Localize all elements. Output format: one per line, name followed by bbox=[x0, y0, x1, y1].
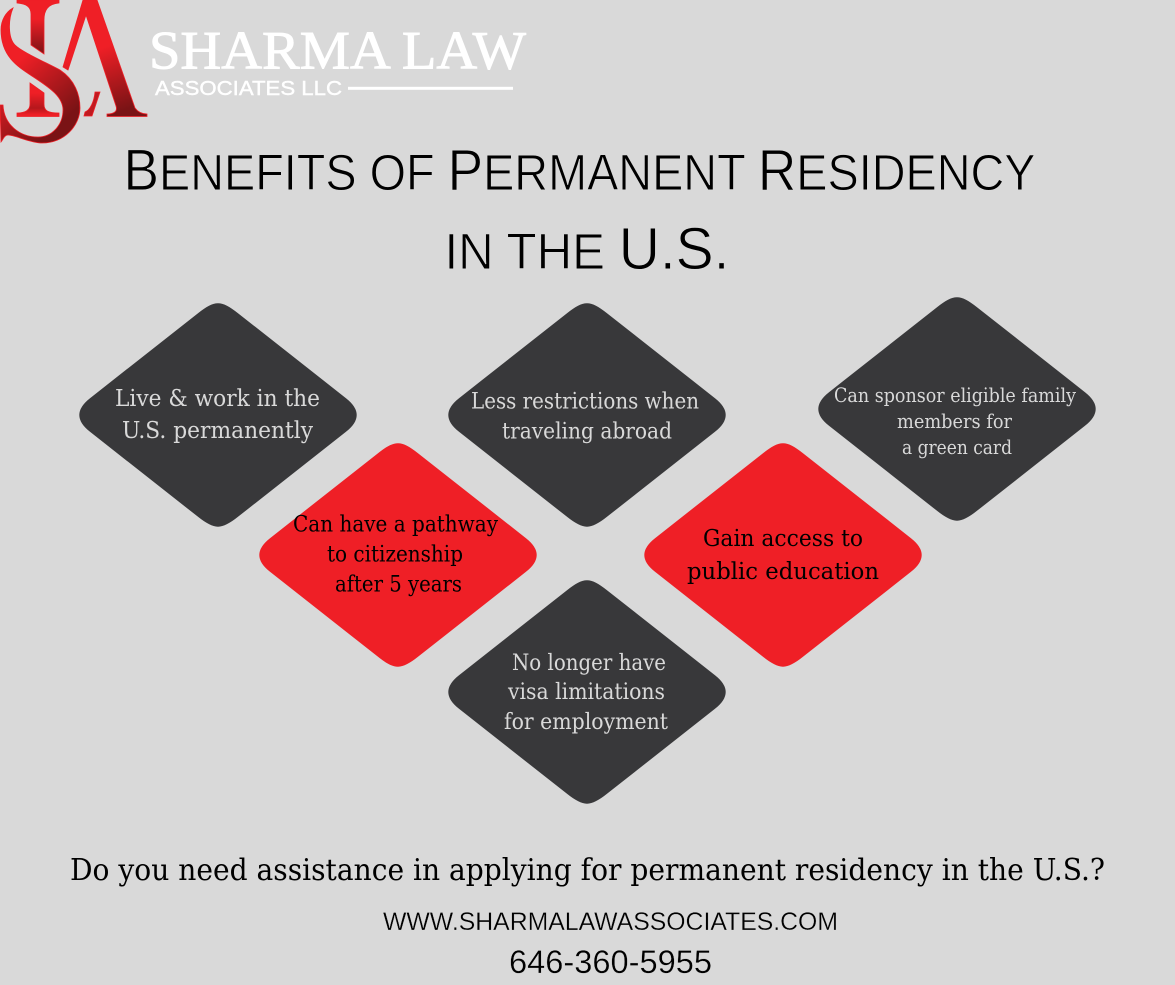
title line 2: IN THE U.S. bbox=[444, 216, 730, 282]
diamond: live and work: U.S. permanently bbox=[122, 416, 314, 444]
diamond: pathway to citizenship: to citizenship bbox=[327, 542, 463, 568]
title bbox=[124, 138, 1036, 282]
diamond: employment bbox=[448, 580, 726, 804]
diamond: travel: traveling abroad bbox=[502, 420, 672, 444]
diamond: live and work bbox=[79, 303, 357, 527]
call to action question: Do you need assistance in applying for permanent residency in the U.S.? bbox=[70, 853, 1105, 888]
diamond: live and work: Live & work in the bbox=[115, 384, 320, 412]
title line 1: BENEFITS OF PERMANENT RESIDENCY bbox=[124, 138, 1036, 203]
diamond: pathway to citizenship: after 5 years bbox=[335, 572, 462, 598]
diamond: public education bbox=[644, 443, 922, 667]
diamond: pathway to citizenship bbox=[259, 443, 537, 667]
diamond: employment: No longer have bbox=[512, 651, 666, 676]
diamond: employment: visa limitations bbox=[507, 680, 665, 705]
phone number: 646-360-5955 bbox=[509, 944, 712, 980]
website: WWW.SHARMALAWASSOCIATES.COM bbox=[383, 908, 838, 936]
icon: SA monogram bbox=[0, 0, 147, 143]
diamond: sponsor family: Can sponsor eligible family bbox=[834, 384, 1076, 407]
logo subtitle: ASSOCIATES LLC bbox=[155, 78, 342, 100]
diamond: sponsor family: a green card bbox=[902, 436, 1012, 459]
logo name: SHARMA LAW bbox=[149, 20, 527, 80]
diamond: sponsor family bbox=[818, 297, 1096, 521]
diamond: public education: Gain access to bbox=[703, 524, 863, 552]
diamond: sponsor family: members for bbox=[897, 410, 1013, 433]
diamond: travel: Less restrictions when bbox=[471, 390, 699, 414]
diamond: travel bbox=[448, 303, 726, 527]
diamond: pathway to citizenship: Can have a pathway bbox=[293, 512, 499, 538]
diamond: employment: for employment bbox=[504, 710, 668, 735]
diamond: public education: public education bbox=[687, 557, 879, 585]
logo bbox=[0, 0, 527, 143]
